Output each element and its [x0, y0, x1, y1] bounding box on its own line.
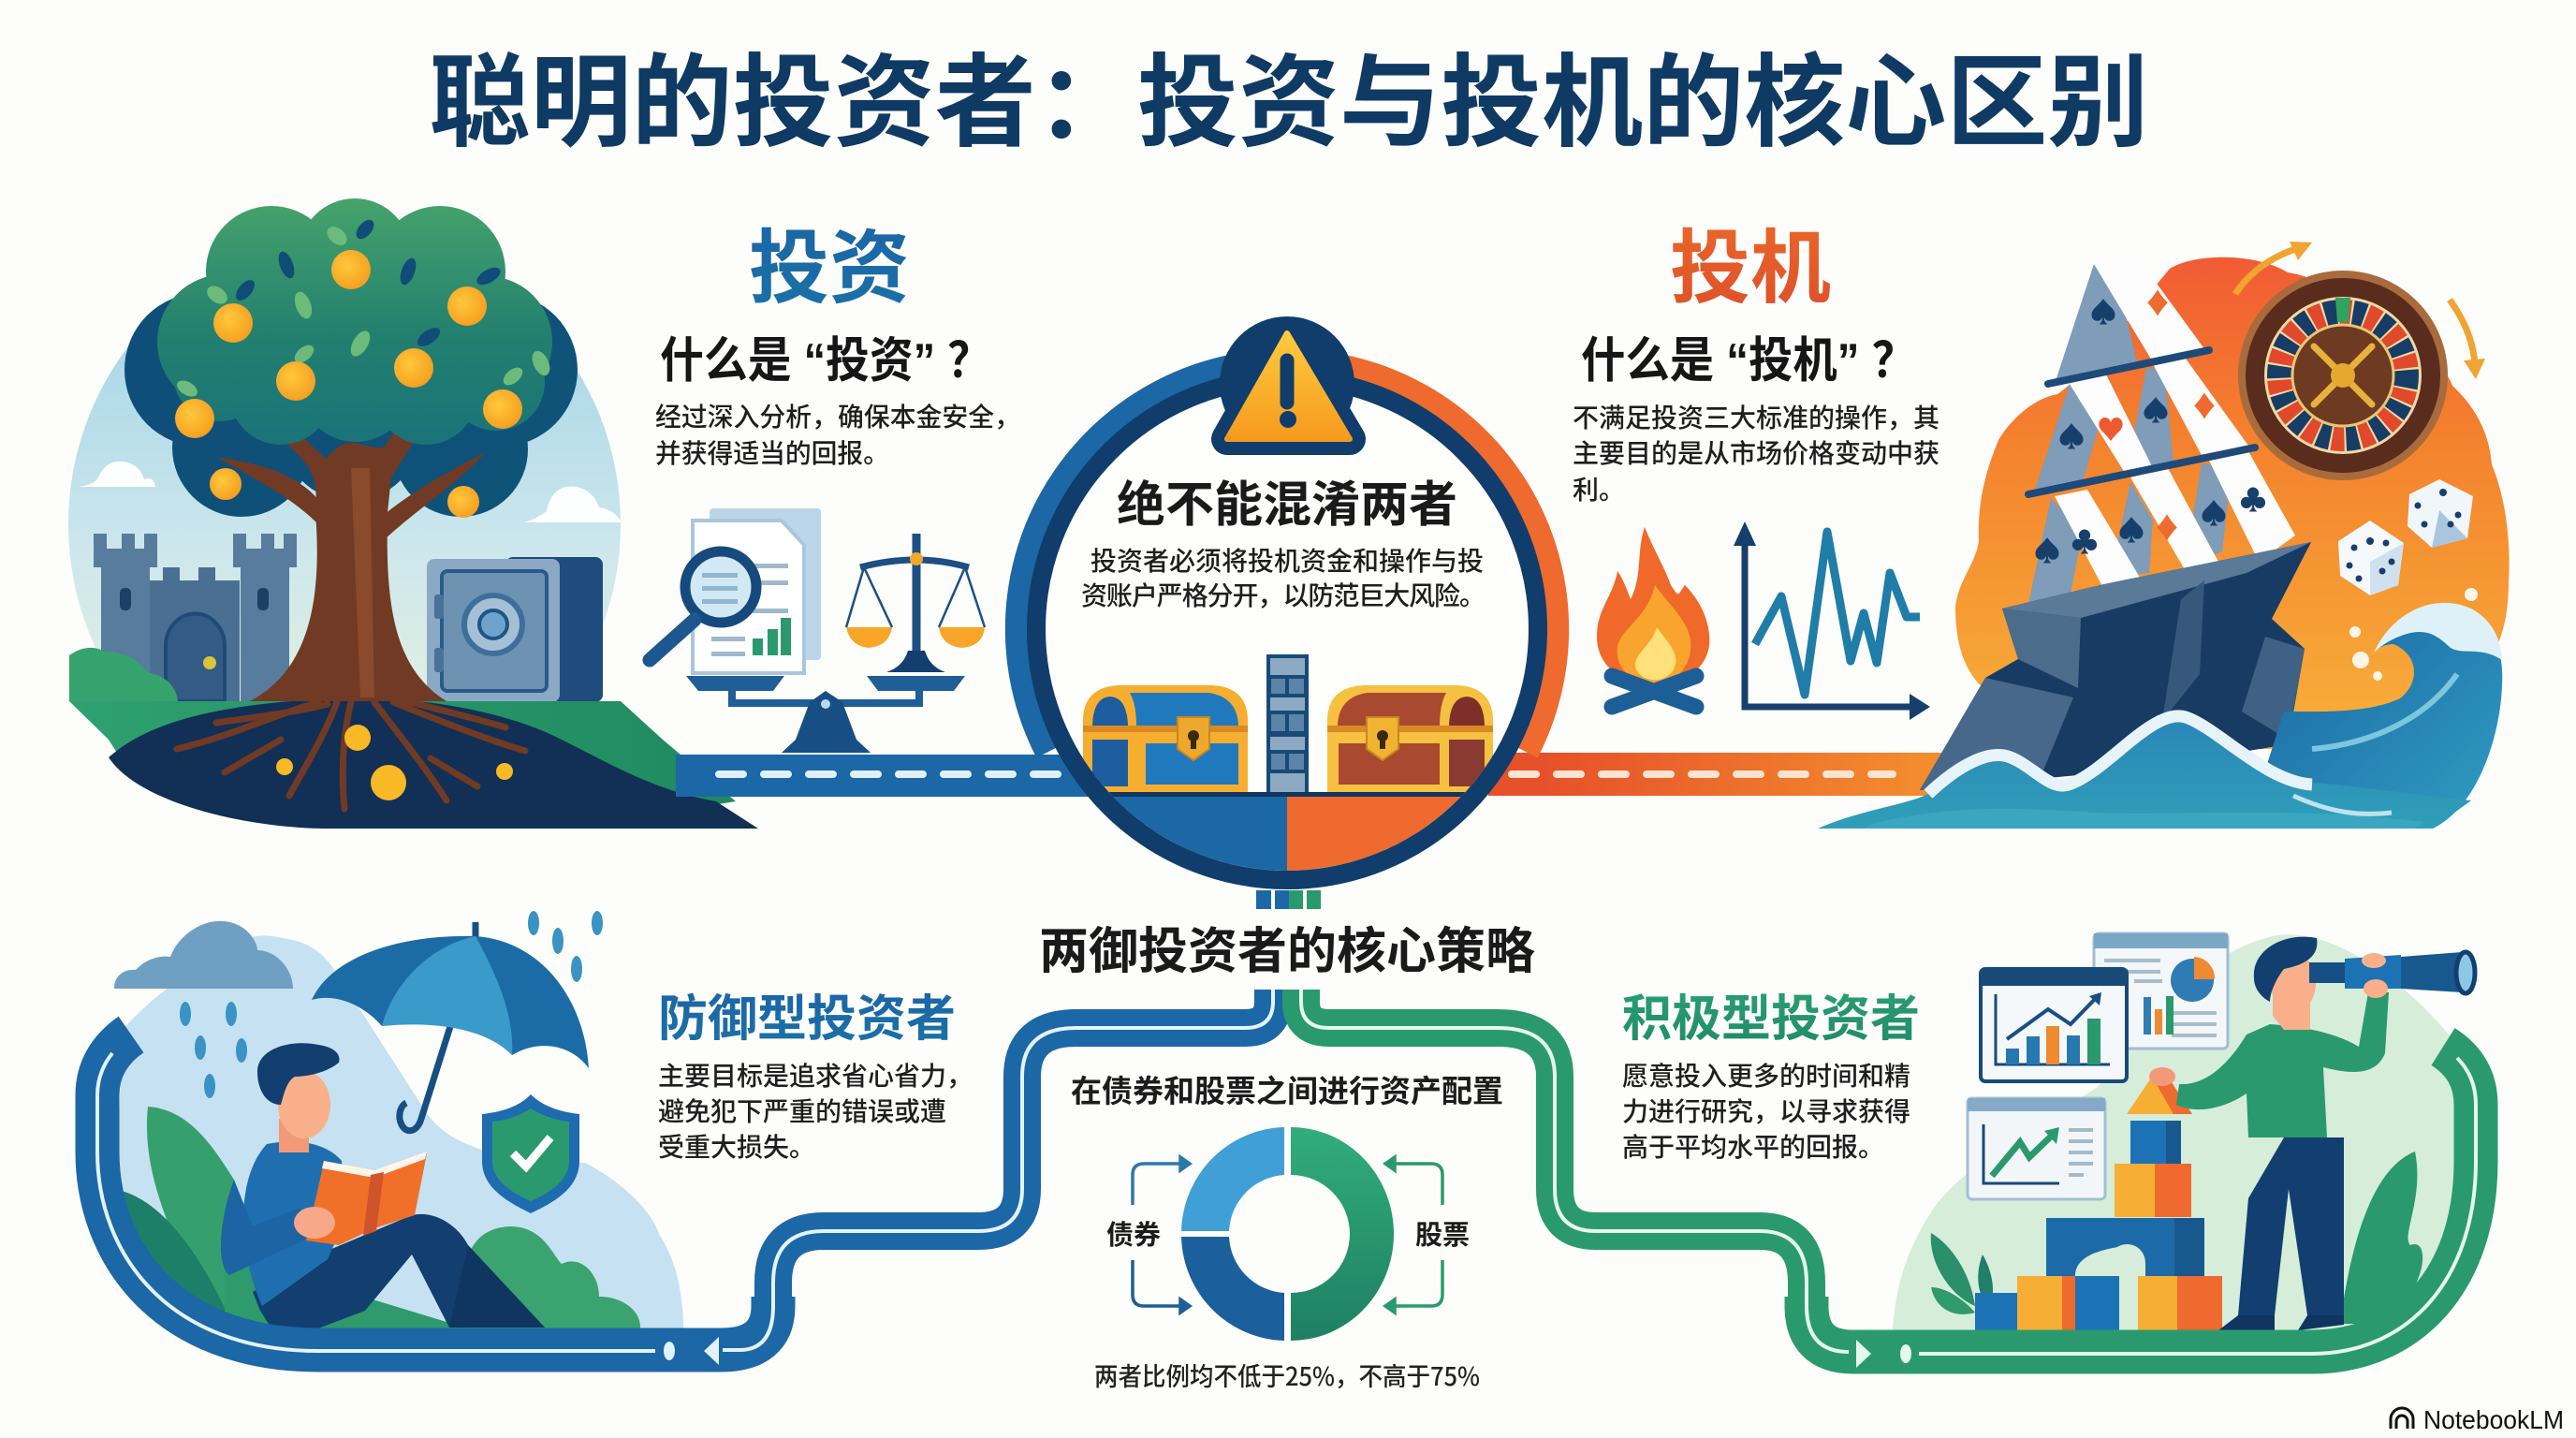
card suits: ♦	[2190, 384, 2218, 425]
plants	[1931, 1152, 2422, 1324]
icon: document with magnifier	[650, 508, 821, 673]
heading: active investor: 积极型投资者	[1622, 979, 1920, 1050]
window: bar chart	[1981, 969, 2127, 1081]
house of cards	[2028, 257, 2295, 604]
bushes	[69, 648, 178, 701]
cloud	[114, 921, 293, 989]
plants	[122, 1107, 640, 1328]
card suits: ♦	[2153, 506, 2181, 547]
tree trunk	[216, 417, 486, 701]
card suits: ♦	[2144, 281, 2172, 322]
circle outer band	[1017, 360, 1558, 753]
telescope	[2309, 952, 2475, 993]
illustration: speculation cards, roulette, rock and wave	[1818, 242, 2510, 829]
text: active description: 力进行研究，以寻求获得	[1622, 1092, 1910, 1129]
rain drops	[180, 911, 603, 1098]
circle text: 投资者必须将投机资金和操作与投	[1090, 541, 1484, 579]
text: active description	[1622, 1056, 1910, 1165]
tree crown back	[124, 215, 578, 517]
split ground	[1110, 794, 1464, 871]
icon: balance scale on seesaw	[686, 534, 985, 753]
text: defensive description: 主要目标是追求省心省力，	[658, 1056, 973, 1093]
arrow: defensive direction	[664, 1337, 719, 1365]
text: investing definition: 并获得适当的回报。	[655, 433, 889, 471]
front waves	[1818, 716, 2471, 829]
circle heading: 绝不能混淆两者	[1117, 465, 1457, 536]
circle interior	[1042, 384, 1532, 874]
rock	[1920, 542, 2311, 790]
icon: warning badge	[1220, 316, 1354, 451]
castle	[94, 534, 297, 708]
card suits	[2033, 281, 2267, 570]
motion arrows	[2235, 248, 2475, 365]
text: active description: 愿意投入更多的时间和精	[1622, 1056, 1910, 1093]
text: speculation definition	[1573, 398, 1939, 507]
chest: blue	[1083, 685, 1248, 794]
blue road	[97, 990, 1273, 1351]
heading: asset allocation: 在债券和股票之间进行资产配置	[1071, 1066, 1503, 1111]
road: investing blue	[676, 755, 1088, 797]
text: defensive description	[658, 1056, 973, 1165]
illustration: investing tree, castle and safe	[68, 198, 758, 829]
text: investing definition: 经过深入分析，确保本金安全，	[655, 397, 1020, 434]
clouds	[79, 462, 622, 522]
standing person with telescope	[2149, 937, 2475, 1330]
roots	[177, 700, 525, 809]
question: what is investing: 什么是 “投资” ？	[660, 334, 991, 389]
arrows: stock allocation	[1385, 1157, 1442, 1313]
road: speculation orange	[1488, 753, 1947, 796]
label: stocks: 股票	[1415, 1213, 1470, 1253]
text: allocation limits: 两者比例均不低于25%，不高于75%	[1094, 1357, 1480, 1393]
illustration: active investor	[1893, 933, 2475, 1330]
big wave	[2247, 588, 2502, 829]
circle navy ring	[1036, 378, 1538, 880]
connector stubs	[1256, 890, 1321, 909]
text: defensive description: 避免犯下严重的错误或遭	[658, 1092, 946, 1129]
card suits: ♠	[2089, 290, 2117, 331]
circle text: 资账户严格分开，以防范巨大风险。	[1081, 576, 1486, 613]
text: speculation definition: 利。	[1573, 470, 1625, 507]
green road	[1301, 990, 2476, 1354]
text: active description: 高于平均水平的回报。	[1622, 1127, 1884, 1165]
treasure chests and wall	[1083, 654, 1493, 797]
text: speculation definition: 主要目的是从市场价格变动中获	[1573, 433, 1939, 471]
building blocks	[1975, 1077, 2222, 1330]
text: defensive description: 受重大损失。	[658, 1127, 815, 1165]
icon: fire on logs	[1597, 527, 1709, 707]
gold coins	[276, 725, 513, 800]
card suits: ♠	[2057, 415, 2086, 456]
panel: do not confuse the two	[1017, 316, 1558, 888]
orange blob	[1955, 257, 2510, 749]
pale green backdrop	[1893, 934, 2470, 1330]
window: pie report	[2094, 933, 2228, 1049]
logo: NotebookLM: NotebookLM	[2423, 1405, 2564, 1434]
light blue backdrop	[117, 935, 683, 1329]
label: bonds: 债券	[1106, 1213, 1161, 1253]
reading person	[221, 1043, 545, 1328]
ground hill	[69, 701, 736, 814]
card suits: ♠	[2142, 389, 2170, 430]
card suits: ♠	[2200, 492, 2228, 533]
dice	[2338, 479, 2473, 595]
shield	[482, 1094, 579, 1213]
heading: defensive investor: 防御型投资者	[658, 979, 956, 1050]
card suits: ♥	[2097, 407, 2125, 448]
arrows: bond allocation	[1133, 1157, 1190, 1313]
heading: core strategies: 两御投资者的核心策略	[1039, 912, 1535, 983]
brick wall	[1266, 654, 1309, 795]
roulette wheel	[2238, 271, 2448, 480]
card suits: ♣	[2239, 477, 2267, 519]
circle text	[1081, 541, 1486, 613]
card suits: ♠	[2033, 529, 2061, 570]
text: speculation definition: 不满足投资三大标准的操作，其	[1573, 398, 1939, 435]
heading: investing: 投资	[749, 202, 910, 319]
chart: allocation donut	[1181, 1127, 1394, 1341]
tree crown front	[157, 198, 552, 445]
text: investing definition	[655, 397, 1020, 471]
illustration: defensive investor	[114, 911, 683, 1329]
safe	[427, 557, 603, 702]
title: 聪明的投资者：投资与投机的核心区别	[429, 22, 2149, 168]
arrow: active direction	[1856, 1340, 1911, 1368]
chart: volatile price line	[1734, 521, 1930, 720]
umbrella	[312, 922, 589, 1131]
card suits: ♠	[2117, 508, 2145, 550]
leaves	[174, 223, 553, 400]
golden fruits	[175, 250, 522, 518]
sky oval	[68, 346, 621, 701]
navy mound	[109, 697, 758, 829]
window: trend chart	[1968, 1098, 2105, 1199]
chest: red	[1327, 685, 1493, 794]
question: what is speculation: 什么是 “投机” ？	[1581, 334, 1916, 389]
card suits: ♣	[2071, 520, 2099, 561]
heading: speculation: 投机	[1670, 202, 1831, 319]
